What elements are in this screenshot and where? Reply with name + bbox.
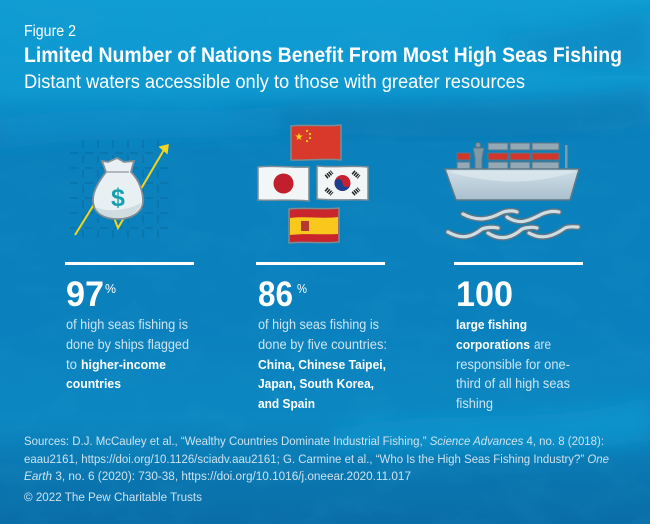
icon: flags of five countries	[258, 125, 368, 243]
stat column: 86 percent: China, Chinese Taipei,	[258, 357, 386, 372]
stat column: 97 percent: done by ships flagged	[66, 337, 189, 352]
stat column: 97 percent: higher-income	[81, 357, 166, 372]
flag: Spain	[289, 208, 339, 243]
stat column: 86 percent: 86	[258, 275, 293, 314]
stat column: 86 percent	[256, 262, 387, 411]
stat column: 86 percent: and Spain	[258, 396, 315, 411]
flag: South Korea	[317, 166, 368, 200]
stat column: 86 percent: Japan, South Korea,	[258, 376, 374, 391]
icon: money bag with rising chart	[70, 140, 172, 242]
flag: Japan	[258, 166, 309, 201]
stat column: 100 corporations: 100	[456, 275, 513, 314]
sources: Sources: D.J. McCauley et al., “Wealthy Countries Dominate Industrial Fishing,” Science Advances 4, no. 8 (2018):	[24, 434, 604, 448]
stat column: 86 percent: done by five countries:	[258, 337, 387, 352]
icon: cargo ship with fish	[445, 142, 579, 238]
stat column: 97 percent: to	[66, 357, 77, 372]
stat column: 97 percent: countries	[66, 376, 121, 391]
ship containers and superstructure	[457, 142, 568, 169]
copyright: © 2022 The Pew Charitable Trusts	[24, 490, 202, 504]
stat column: 97 percent: 97	[66, 275, 104, 314]
stat column: 100 corporations: large fishing	[456, 317, 527, 332]
stat column: 100 corporations: fishing	[456, 396, 493, 411]
icon: money bag with rising chart: $	[111, 184, 125, 212]
stat column: 100 corporations	[454, 262, 583, 411]
stat column: 97 percent	[65, 262, 194, 391]
ship hull	[445, 169, 579, 200]
stat column: 86 percent: of high seas fishing is	[258, 317, 379, 332]
sources: eaau2161, https://doi.org/10.1126/sciadv.aau2161; G. Carmine et al., “Who Is the High Seas Fishing Industry?” One	[24, 452, 609, 466]
sources	[24, 434, 609, 483]
flag: China: ★	[295, 132, 304, 143]
stat column: 100 corporations: responsible for one-	[456, 357, 570, 372]
stat column: 86 percent: %	[297, 281, 307, 296]
stat column: 100 corporations: corporations	[456, 337, 530, 352]
subtitle: Distant waters accessible only to those with greater resources	[24, 72, 525, 93]
header: figure label, title, subtitle	[24, 23, 622, 93]
stat column: 100 corporations: are	[534, 337, 551, 352]
fish	[448, 211, 578, 238]
stat column: 100 corporations: third of all high seas	[456, 376, 570, 391]
stat column: 97 percent: of high seas fishing is	[66, 317, 188, 332]
sources: Earth 3, no. 6 (2020): 730-38, https://doi.org/10.1016/j.oneear.2020.11.017	[24, 469, 411, 483]
stat column: 97 percent: %	[105, 281, 116, 296]
figure label: Figure 2	[24, 23, 76, 40]
